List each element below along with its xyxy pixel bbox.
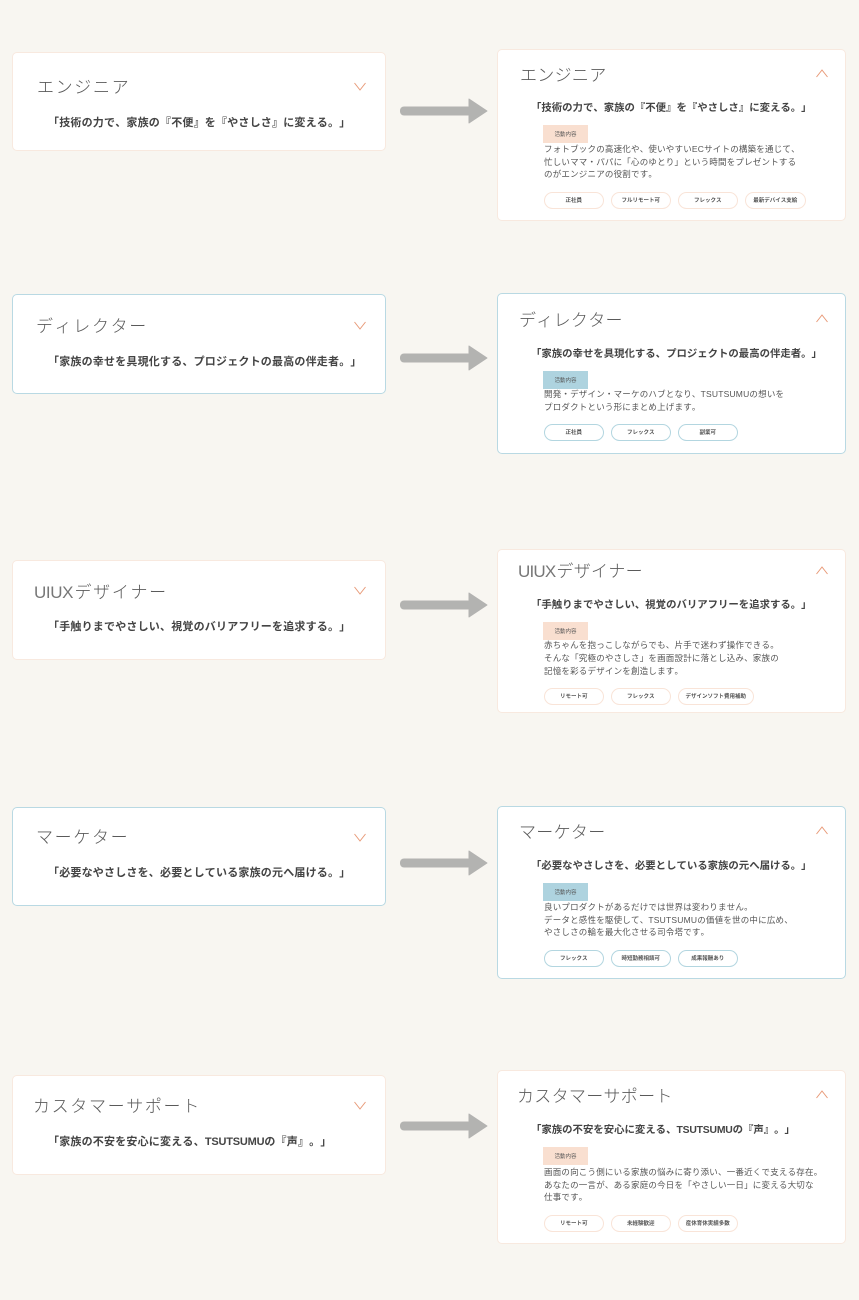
chips: 未経験歓迎 bbox=[627, 1221, 654, 1227]
panel: UIUX designer expanded bbox=[497, 549, 846, 713]
heading: UIUXデザイナー bbox=[518, 562, 643, 581]
chips: フレックス bbox=[627, 694, 654, 700]
chips: 副業可 bbox=[699, 430, 716, 436]
arrow bbox=[400, 346, 488, 370]
description bbox=[544, 144, 800, 179]
chips bbox=[544, 192, 806, 209]
icon: chevron up bbox=[816, 69, 828, 78]
chips bbox=[544, 688, 754, 705]
description bbox=[544, 640, 779, 676]
tagline: 「手触りまでやさしい、視覚のバリアフリーを追求する。」 bbox=[531, 600, 812, 611]
chips: 正社員 bbox=[565, 430, 582, 436]
tag bbox=[543, 622, 588, 640]
chips: デザインソフト費用補助 bbox=[685, 694, 746, 700]
icon: chevron up bbox=[816, 566, 828, 574]
tagline: 「家族の幸せを具現化する、プロジェクトの最高の伴走者。」 bbox=[531, 349, 822, 360]
icon: chevron up bbox=[816, 826, 828, 834]
description bbox=[544, 1167, 822, 1202]
description: データと感性を駆使して、TSUTSUMUの価値を世の中に広め、 bbox=[544, 914, 793, 924]
icon: chevron down bbox=[354, 82, 366, 91]
arrow bbox=[400, 850, 488, 876]
tag: 活動内容 bbox=[554, 629, 576, 635]
panel: director collapsed bbox=[12, 294, 386, 394]
panel: engineer expanded bbox=[497, 49, 846, 221]
heading: カスタマーサポート bbox=[33, 1097, 201, 1116]
panel: marketer expanded bbox=[497, 806, 846, 979]
tagline: 「技術の力で、家族の『不便』を『やさしさ』に変える。」 bbox=[531, 103, 812, 114]
heading: エンジニア bbox=[37, 78, 130, 97]
heading: UIUXデザイナー bbox=[34, 583, 168, 602]
tagline: 「手触りまでやさしい、視覚のバリアフリーを追求する。」 bbox=[48, 621, 350, 633]
tag: 活動内容 bbox=[554, 378, 576, 384]
icon: chevron up bbox=[816, 314, 828, 322]
heading: ディレクター bbox=[36, 317, 148, 336]
tagline: 「家族の幸せを具現化する、プロジェクトの最高の伴走者。」 bbox=[48, 356, 362, 368]
icon: chevron down bbox=[354, 834, 366, 842]
chips: フレックス bbox=[627, 430, 654, 436]
tag bbox=[543, 371, 588, 389]
tagline: 「家族の不安を安心に変える、TSUTSUMUの『声』。」 bbox=[48, 1136, 332, 1148]
description: プロダクトという形にまとめ上げます。 bbox=[544, 402, 701, 412]
chips: 産休育休実績多数 bbox=[686, 1221, 730, 1227]
description: フォトブックの高速化や、使いやすいECサイトの構築を通じて、 bbox=[544, 144, 800, 154]
icon: chevron down bbox=[354, 1102, 366, 1110]
icon: chevron down bbox=[354, 322, 366, 330]
description: やさしさの輪を最大化させる司令塔です。 bbox=[544, 927, 709, 937]
tag: 活動内容 bbox=[554, 1154, 576, 1160]
description: そんな「究極のやさしさ」を画面設計に落とし込み、家族の bbox=[544, 653, 779, 663]
chips: フルリモート可 bbox=[621, 198, 660, 204]
arrow bbox=[400, 98, 488, 124]
panel: marketer collapsed bbox=[12, 807, 386, 906]
tagline: 「技術の力で、家族の『不便』を『やさしさ』に変える。」 bbox=[48, 117, 350, 129]
tag bbox=[543, 1147, 588, 1165]
chips: 最新デバイス支給 bbox=[753, 198, 797, 204]
chips: リモート可 bbox=[560, 694, 588, 700]
panel: engineer collapsed bbox=[12, 52, 386, 151]
chips: フレックス bbox=[560, 956, 588, 962]
heading: カスタマーサポート bbox=[517, 1087, 673, 1106]
description: 忙しいママ・パパに「心のゆとり」という時間をプレゼントする bbox=[544, 156, 796, 166]
heading: マーケター bbox=[519, 823, 606, 842]
chips: 時短勤務相談可 bbox=[621, 956, 660, 962]
chips bbox=[544, 950, 738, 967]
panel: UIUX designer collapsed bbox=[12, 560, 386, 660]
tag: 活動内容 bbox=[554, 890, 576, 896]
chips: 成果報酬あり bbox=[691, 956, 724, 962]
panel: director expanded bbox=[497, 293, 846, 454]
chips bbox=[544, 424, 738, 441]
icon: chevron down bbox=[354, 586, 366, 595]
description: 仕事です。 bbox=[544, 1192, 588, 1202]
heading: ディレクター bbox=[519, 311, 623, 330]
chips: 正社員 bbox=[565, 198, 582, 204]
chips: リモート可 bbox=[560, 1221, 588, 1227]
tagline: 「必要なやさしさを、必要としている家族の元へ届ける。」 bbox=[531, 861, 812, 872]
tagline: 「家族の不安を安心に変える、TSUTSUMUの『声』。」 bbox=[531, 1125, 795, 1136]
description: 開発・デザイン・マーケのハブとなり、TSUTSUMUの想いを bbox=[544, 389, 784, 399]
description: あなたの一言が、ある家庭の今日を「やさしい一日」に変える大切な bbox=[544, 1180, 814, 1190]
tagline: 「必要なやさしさを、必要としている家族の元へ届ける。」 bbox=[48, 867, 350, 879]
tag: 活動内容 bbox=[554, 132, 576, 138]
icon: chevron up bbox=[816, 1090, 828, 1098]
heading: マーケター bbox=[36, 828, 129, 847]
chips: フレックス bbox=[694, 198, 722, 204]
arrow bbox=[400, 1114, 488, 1138]
description: のがエンジニアの役割です。 bbox=[544, 169, 657, 179]
chips bbox=[544, 1215, 738, 1232]
arrow bbox=[400, 592, 488, 618]
panel: customer support expanded bbox=[497, 1070, 846, 1244]
description bbox=[544, 389, 784, 412]
description bbox=[544, 902, 793, 937]
panel: customer support collapsed bbox=[12, 1075, 386, 1175]
tag bbox=[543, 883, 588, 901]
description: 記憶を彩るデザインを創造します。 bbox=[544, 666, 683, 676]
description: 赤ちゃんを抱っこしながらでも、片手で迷わず操作できる。 bbox=[544, 640, 779, 650]
tag bbox=[543, 125, 588, 143]
description: 良いプロダクトがあるだけでは世界は変わりません。 bbox=[544, 902, 753, 912]
description: 画面の向こう側にいる家族の悩みに寄り添い、一番近くで支える存在。 bbox=[544, 1167, 822, 1177]
heading: エンジニア bbox=[520, 66, 606, 84]
